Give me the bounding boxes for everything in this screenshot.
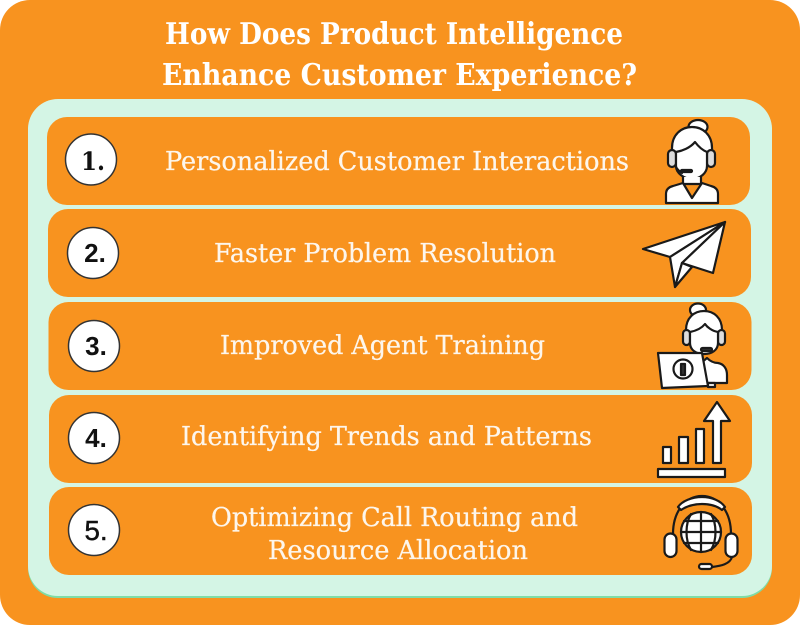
row 4 label: Identifying Trends and Patterns [181, 422, 592, 452]
number badge 1 [66, 134, 116, 185]
number badge 3: 3. [85, 331, 107, 361]
number badge 2: 2. [84, 238, 106, 268]
number badge 5: 5. [84, 515, 108, 546]
row 5: optimizing call routing and resource allocation [49, 487, 752, 575]
row 4: identifying trends and patterns [49, 395, 752, 483]
number badge 2 [68, 228, 118, 278]
number badge 1: 1. [81, 147, 105, 176]
row 2: faster problem resolution [48, 209, 751, 297]
title: How Does Product Intelligence [165, 17, 623, 52]
number badge 3 [68, 320, 120, 372]
icon: agent at laptop [658, 304, 727, 388]
icon: bar chart with rising arrow [658, 402, 730, 477]
row 1: personalized customer interactions [47, 117, 750, 205]
row 5 label: Optimizing Call Routing and [211, 503, 578, 533]
number badge 4: 4. [85, 423, 107, 453]
row 1 label: Personalized Customer Interactions [165, 147, 629, 177]
row 5: optimizing call routing and resource allocation: Resource Allocation [268, 536, 528, 566]
number badge 5 [68, 504, 120, 556]
title: Enhance Customer Experience? [162, 58, 637, 93]
row 3: improved agent training [48, 302, 752, 390]
icon: support agent [666, 120, 718, 203]
row 3 label: Improved Agent Training [220, 331, 545, 361]
panel: mint container [28, 99, 772, 598]
icon: paper plane [643, 222, 725, 287]
icon: headset with globe [664, 496, 738, 569]
title [162, 17, 637, 93]
row 2 label: Faster Problem Resolution [214, 239, 556, 269]
number badge 4 [68, 412, 120, 464]
